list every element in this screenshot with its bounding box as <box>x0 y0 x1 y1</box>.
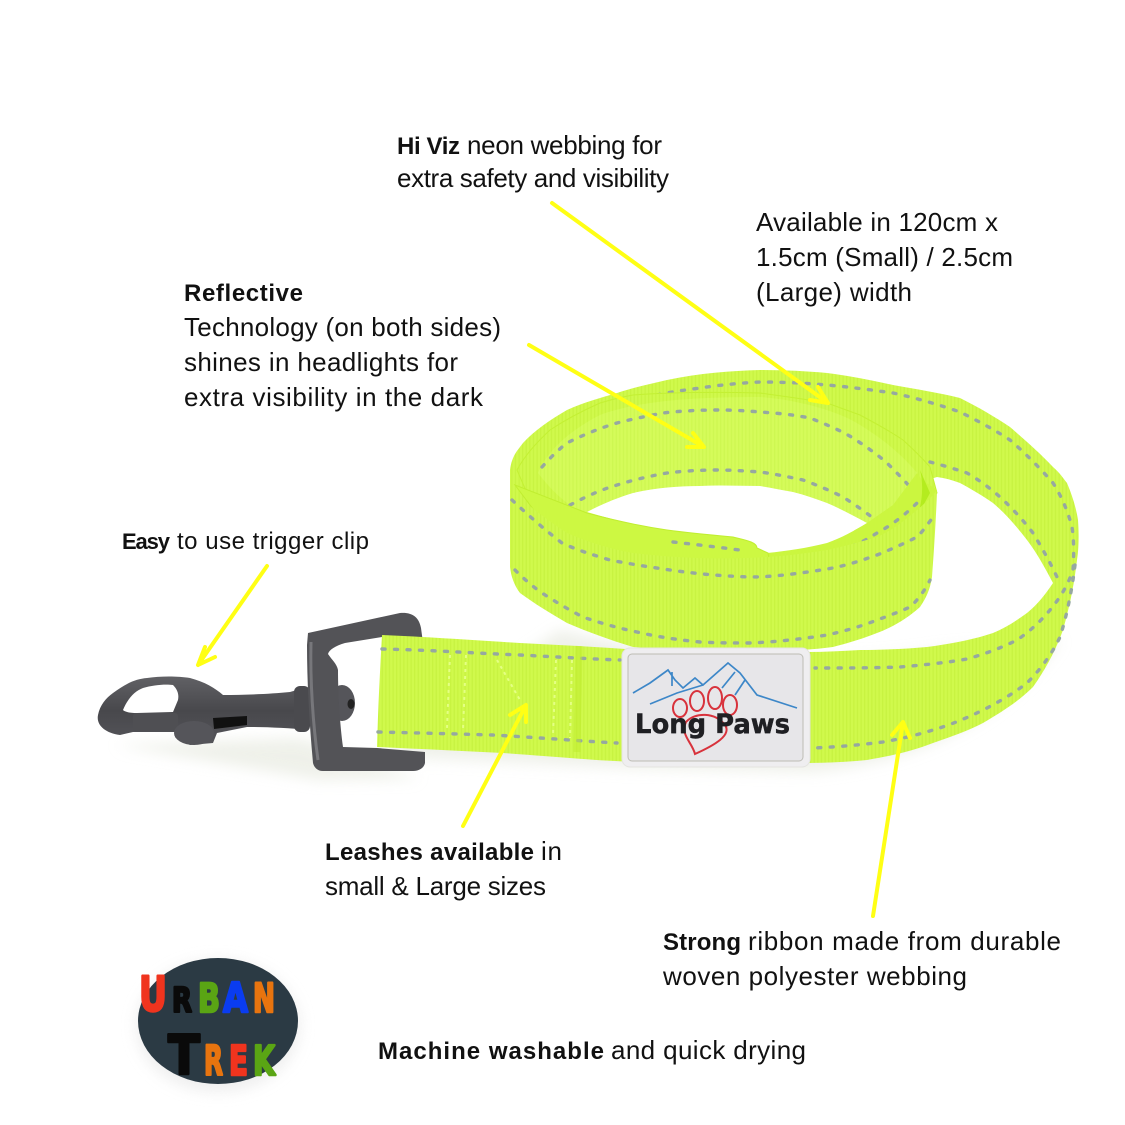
callout: strong ribbon <box>662 926 1061 991</box>
logo: Urban Trek: U <box>139 967 167 1023</box>
logo: Urban Trek: A <box>223 974 248 1022</box>
callout: reflective: Reflective <box>184 280 303 307</box>
dark inner fold <box>917 470 930 517</box>
callout: reflective: shines in headlights for <box>184 347 458 377</box>
callout: sizes: (Large) width <box>756 277 912 307</box>
swivel ring <box>307 613 425 771</box>
callout: hi viz: neon webbing for <box>467 130 662 160</box>
callout: hi viz: Hi Viz <box>397 133 460 160</box>
callout: machine washable <box>378 1035 806 1065</box>
strap: back and right section <box>510 370 1079 763</box>
arrow: trigger clip <box>198 566 267 665</box>
callout: reflective: extra visibility in the dark <box>184 382 484 412</box>
stitching: inner surface <box>542 410 910 518</box>
clip body <box>98 676 307 745</box>
arrow: leash sizes <box>463 705 526 826</box>
callout: sizes: Available in 120cm x <box>756 207 998 237</box>
folded tab <box>515 485 770 566</box>
callout: machine washable: and quick drying <box>611 1035 806 1065</box>
callout: hi viz <box>397 130 669 193</box>
brand name: Long Paws <box>635 709 790 740</box>
strap: section near the clip <box>377 635 640 762</box>
callout: trigger clip: to use trigger clip <box>177 528 369 555</box>
logo: Urban Trek: R <box>204 1037 223 1085</box>
stitching: back and right strap <box>657 382 1075 748</box>
mountains <box>633 663 797 708</box>
callout: hi viz: extra safety and visibility <box>397 163 669 193</box>
logo: Urban Trek: E <box>229 1037 248 1085</box>
stitching: folded layer <box>840 503 917 550</box>
folded strap layer on the right <box>767 473 937 562</box>
gate <box>133 713 178 731</box>
paw <box>673 687 737 754</box>
arrow: strong ribbon <box>873 722 910 916</box>
callout: leash sizes: in <box>541 836 562 866</box>
callout: leash sizes <box>325 836 562 901</box>
swivel pin <box>329 685 355 721</box>
callout: sizes <box>756 207 1013 307</box>
callout: sizes: 1.5cm (Small) / 2.5cm <box>756 242 1013 272</box>
stitching: clip section <box>378 646 620 752</box>
logo: Urban Trek: R <box>172 981 192 1021</box>
callout: leash sizes: Leashes available <box>325 839 534 866</box>
strap: front section of the loop <box>510 490 937 651</box>
trigger clip <box>98 613 425 771</box>
callout: strong ribbon: woven polyester webbing <box>662 961 967 991</box>
hole of the loop <box>587 486 867 553</box>
callout: trigger clip: Easy <box>122 529 171 554</box>
callout: leash sizes: small & Large sizes <box>325 871 546 901</box>
logo: Urban Trek: K <box>253 1037 277 1085</box>
brand badge: Long Paws <box>622 648 810 767</box>
stitching: front loop <box>512 500 933 643</box>
neon leash product <box>98 370 1079 780</box>
arrow: hi viz <box>552 203 828 403</box>
callout: strong ribbon: ribbon made from durable <box>748 926 1061 956</box>
stitching: tab <box>673 542 747 551</box>
strap: layered rim of the loop <box>517 392 937 530</box>
logo: Urban Trek: B <box>198 976 220 1022</box>
callout: strong ribbon: Strong <box>663 929 741 956</box>
logo: Urban Trek: N <box>253 976 275 1022</box>
callout: reflective: Technology (on both sides) <box>184 312 501 342</box>
callout: machine washable: Machine washable <box>378 1038 604 1065</box>
logo: Urban Trek <box>136 958 300 1092</box>
soft shadow <box>115 630 1060 780</box>
callout: reflective <box>184 280 501 412</box>
strap: inner surface of the loop <box>538 397 918 525</box>
arrow: reflective <box>529 345 704 447</box>
logo: Urban Trek: T <box>168 1024 200 1087</box>
